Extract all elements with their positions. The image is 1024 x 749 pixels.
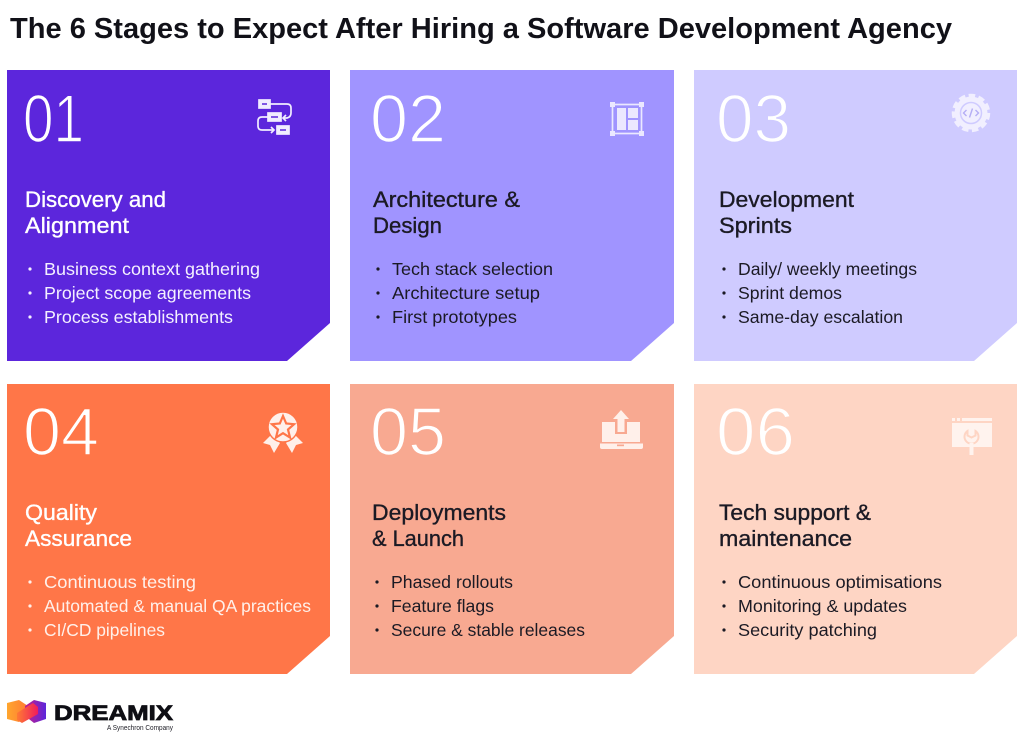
heading	[372, 500, 506, 551]
bullet list: Daily/ weekly meetings	[738, 259, 917, 279]
bullet list	[375, 572, 585, 640]
heading: Assurance	[25, 526, 132, 551]
stage number 02: 02	[370, 81, 446, 157]
panel: stage 03 Development Sprints	[694, 70, 1017, 361]
heading: Design	[373, 213, 442, 238]
heading: Quality	[25, 500, 97, 525]
bullet list	[722, 572, 942, 640]
heading: Discovery and	[25, 187, 166, 212]
panel: stage 02 Architecture & Design	[350, 70, 674, 361]
heading	[25, 187, 166, 238]
bullet list	[28, 572, 311, 640]
bullet list	[722, 259, 917, 327]
bullet list: Business context gathering	[44, 259, 260, 279]
heading: maintenance	[719, 526, 852, 551]
bullet list: First prototypes	[392, 307, 517, 327]
stage number 06: 06	[716, 394, 795, 470]
icon: code gear	[954, 96, 988, 130]
heading: Development	[719, 187, 854, 212]
heading: Sprints	[719, 213, 792, 238]
bullet list: Tech stack selection	[392, 259, 553, 279]
heading: & Launch	[372, 526, 464, 551]
title: The 6 Stages to Expect After Hiring a Software Development Agency	[10, 13, 952, 45]
heading: Deployments	[372, 500, 506, 525]
panel: stage 05 Deployments & Launch	[350, 384, 674, 674]
heading: Tech support &	[719, 500, 871, 525]
bullet list: Sprint demos	[738, 283, 842, 303]
bullet list: Secure & stable releases	[391, 620, 585, 640]
heading: Architecture &	[373, 187, 520, 212]
bullet list: Architecture setup	[392, 283, 540, 303]
icon: layout frame	[610, 102, 644, 136]
bullet list: Continuous testing	[44, 572, 196, 592]
bullet list	[376, 259, 553, 327]
bullet list: Feature flags	[391, 596, 494, 616]
bullet list: CI/CD pipelines	[44, 620, 165, 640]
heading	[373, 187, 520, 238]
stage number 04: 04	[23, 394, 99, 470]
bullet list: Automated & manual QA practices	[44, 596, 311, 616]
heading	[719, 500, 871, 551]
icon: window with wrench	[952, 418, 992, 455]
bullet list: Monitoring & updates	[738, 596, 907, 616]
logo: Dreamix	[7, 700, 173, 732]
icon: process flow	[258, 100, 291, 134]
bullet list: Same-day escalation	[738, 307, 903, 327]
wordmark: DREAMIX	[54, 702, 173, 725]
heading	[719, 187, 854, 238]
heading	[25, 500, 132, 551]
panel: stage 06 Tech support & maintenance	[694, 384, 1017, 674]
bullet list: Process establishments	[44, 307, 233, 327]
tagline: A Synechron Company	[107, 723, 173, 732]
icon: laptop upload	[600, 410, 643, 449]
bullet list: Project scope agreements	[44, 283, 251, 303]
bullet list	[28, 259, 260, 327]
icon: award badge	[263, 412, 303, 453]
panel: stage 01 Discovery and Alignment	[7, 70, 330, 361]
bullet list: Continuous optimisations	[738, 572, 942, 592]
heading: Alignment	[25, 213, 129, 238]
bullet list: Phased rollouts	[391, 572, 513, 592]
stage number 05: 05	[370, 394, 446, 470]
stage number 03: 03	[716, 81, 791, 157]
panel: stage 04 Quality Assurance	[7, 384, 330, 674]
bullet list: Security patching	[738, 620, 877, 640]
stage number 01: 01	[23, 81, 84, 157]
icon: Dreamix ribbon mark	[7, 700, 46, 723]
